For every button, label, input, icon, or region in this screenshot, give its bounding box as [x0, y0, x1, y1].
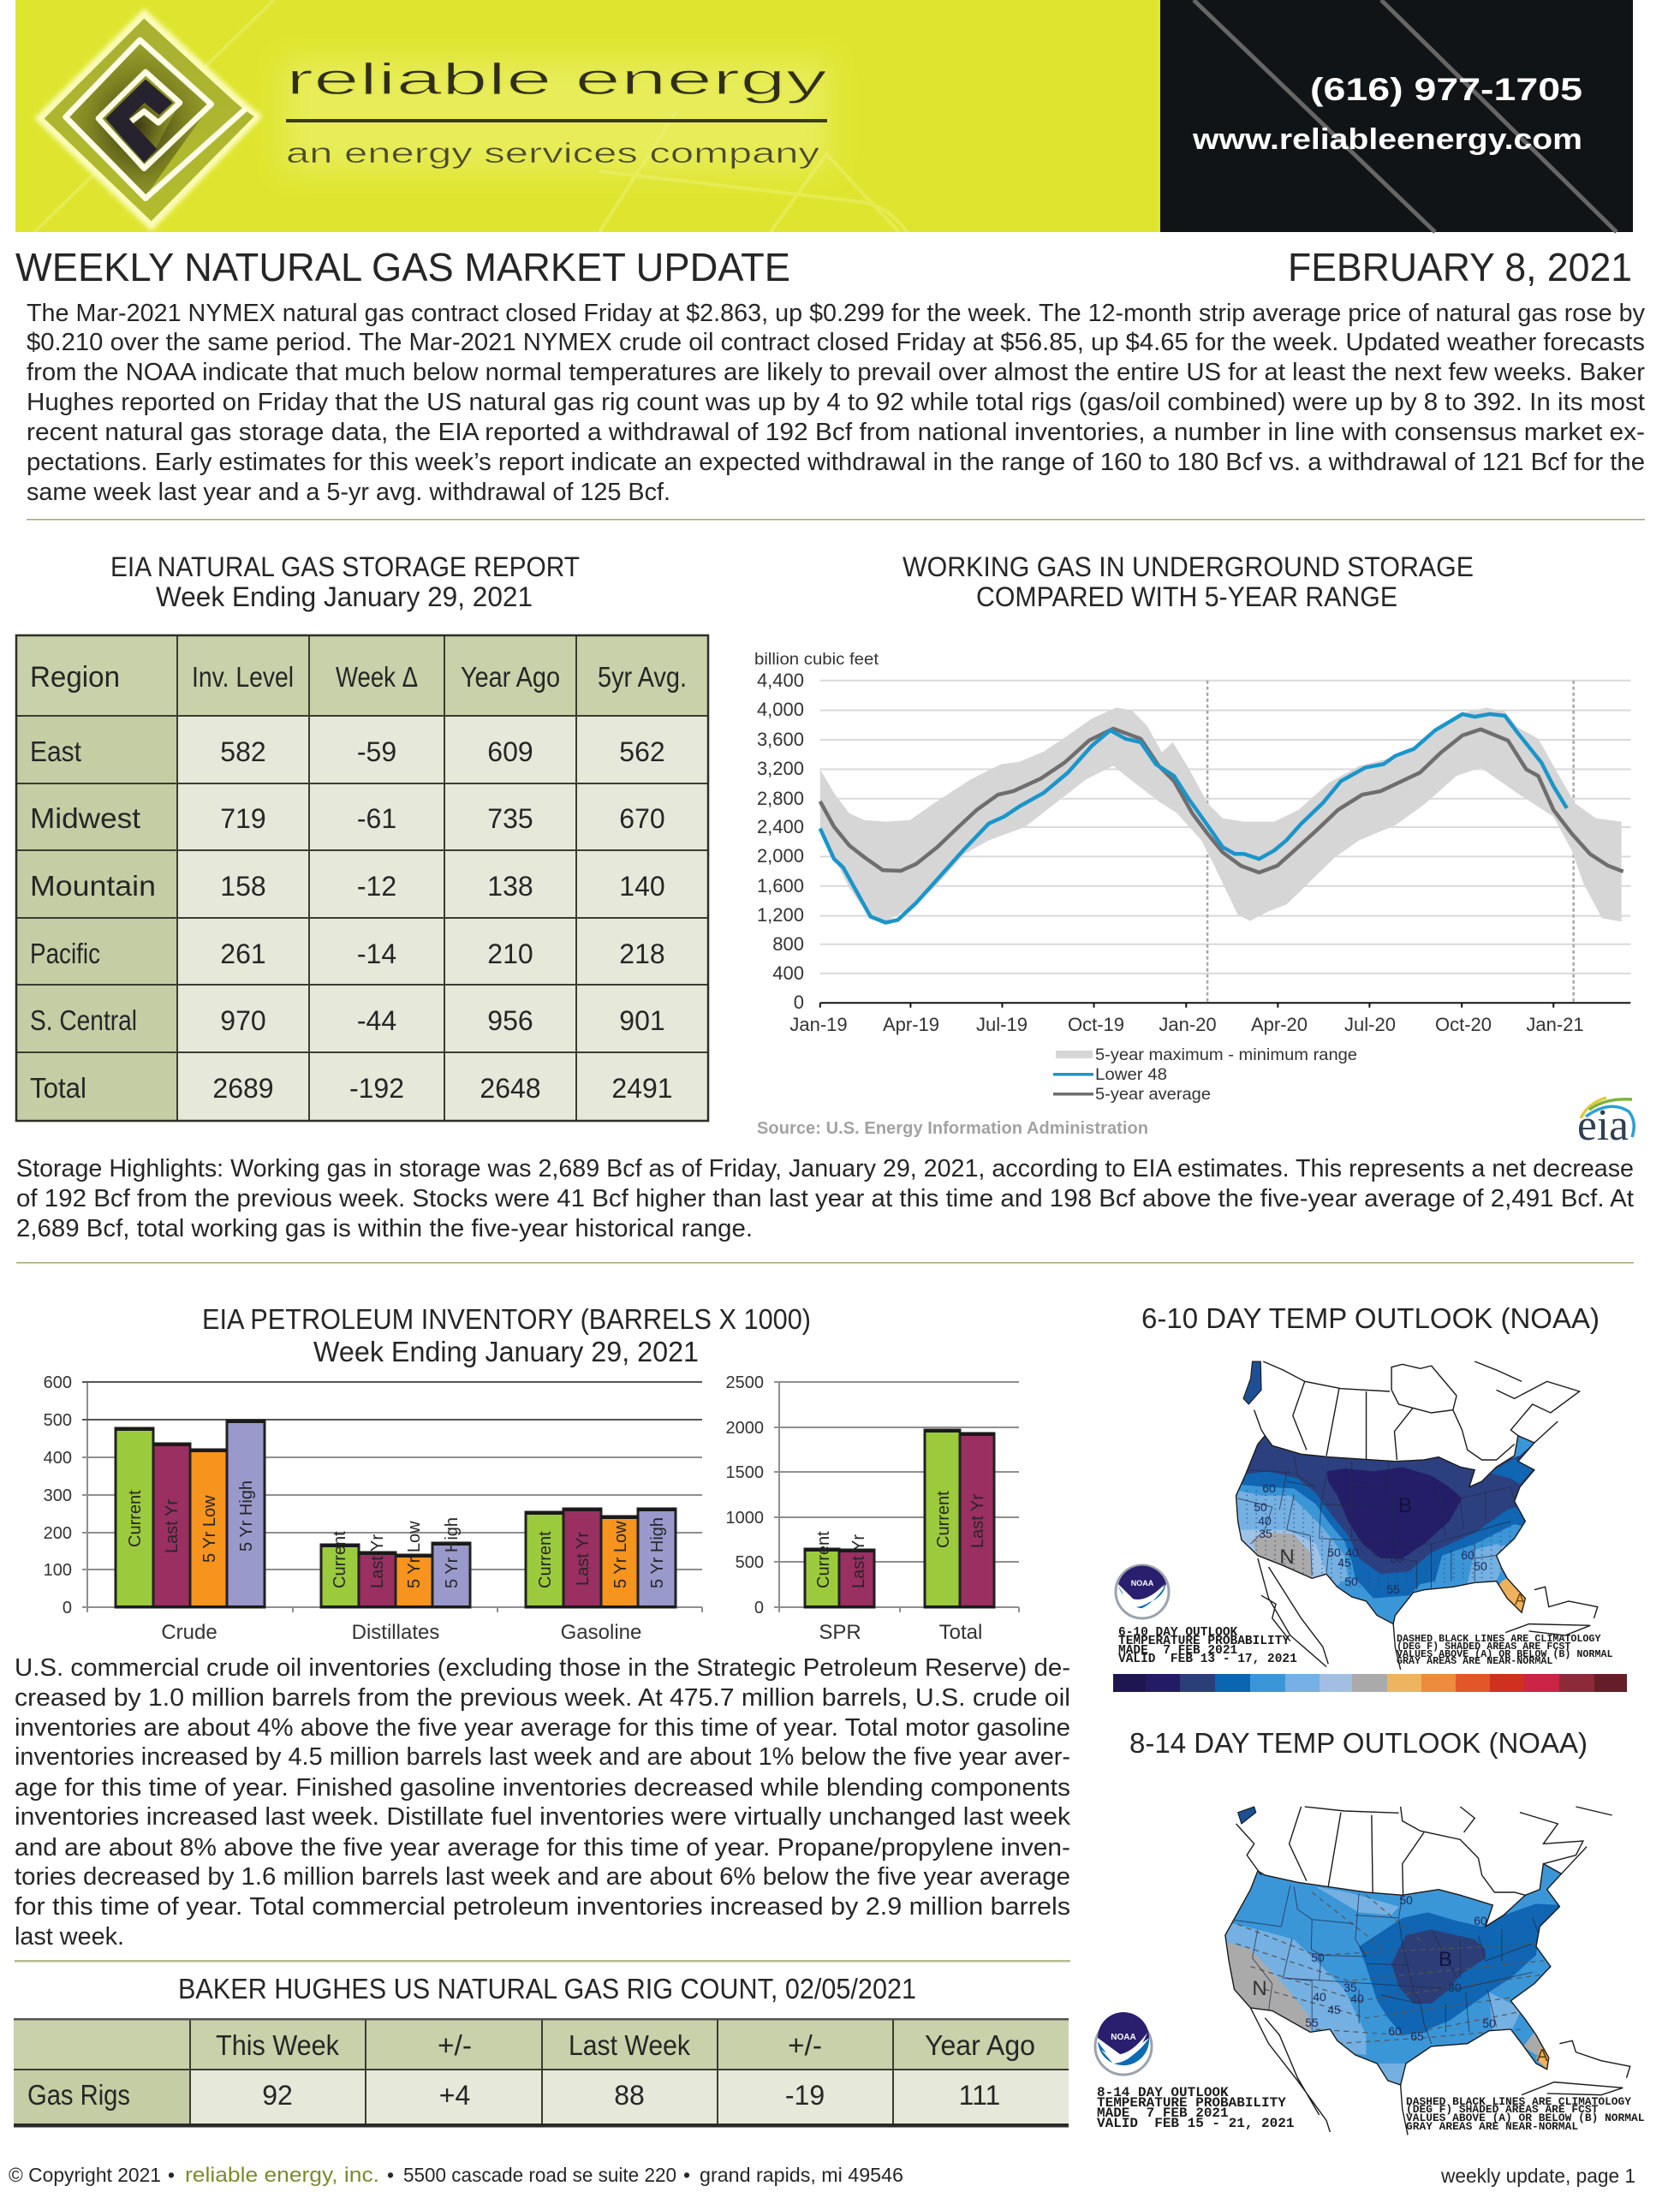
y axis labels: 0	[754, 1599, 764, 1617]
map region letters	[1279, 1494, 1525, 1608]
crude bars	[116, 1421, 265, 1608]
map region letters: B	[1398, 1494, 1412, 1517]
table: storage report: 2491	[611, 1073, 673, 1104]
table: storage report: -61	[357, 803, 396, 834]
distillates bars: Current	[331, 1531, 349, 1588]
date: FEBRUARY 8, 2021	[1288, 245, 1632, 289]
table: storage report: 901	[619, 1005, 665, 1036]
table: storage report: Inv. Level	[192, 661, 294, 693]
y axis labels: 4,400	[757, 670, 804, 691]
gasoline bars	[526, 1509, 676, 1608]
market summary paragraph	[27, 300, 1645, 506]
banner faint light curves	[33, 0, 909, 232]
outlook caption	[1118, 1626, 1297, 1666]
table: rig count: +/-	[438, 2029, 472, 2061]
map contour labels: 50	[1344, 1575, 1358, 1588]
storage highlights paragraph: of 192 Bcf from the previous week. Stocks were 41 Bcf higher than last year at this time and 198 Bcf above the five-year average of 2,491 Bcf. At	[16, 1185, 1634, 1212]
x axis labels: Oct-20	[1435, 1014, 1492, 1035]
country and coast outlines	[1225, 1864, 1562, 2085]
icon: NOAA logo	[1116, 1565, 1169, 1618]
category labels: Crude	[161, 1621, 217, 1644]
five-year range band	[820, 707, 1622, 921]
map contour labels: 60	[1474, 1914, 1487, 1927]
gridlines and axis	[774, 1382, 1019, 1612]
shaded probability regions	[1214, 1807, 1630, 2135]
map contour labels: 30	[1448, 1981, 1462, 1994]
crude bars: Last Yr	[163, 1499, 182, 1553]
y axis labels: 800	[772, 933, 804, 955]
distillates bars	[321, 1517, 470, 1608]
gasoline bars: 5 Yr High	[648, 1517, 667, 1588]
table: rig count	[14, 2018, 1069, 2127]
market summary paragraph: pectations. Early estimates for this week’s report indicate an expected withdrawal in the range of 160 to 180 Bcf vs. a withdrawal of 121 Bcf for the	[27, 449, 1645, 476]
map contour labels: 45	[1337, 1556, 1351, 1570]
x axis labels: Apr-19	[883, 1014, 939, 1035]
table: storage report: 582	[220, 736, 266, 767]
legend: 5-year average	[1095, 1086, 1211, 1104]
y axis labels: 1,600	[757, 875, 804, 896]
map contour labels: 55	[1305, 2016, 1319, 2029]
table: storage report: 210	[487, 938, 533, 969]
heading: EIA storage report: Week Ending January 29, 2021	[156, 581, 533, 612]
map contour labels: 50	[1482, 2016, 1496, 2030]
y axis labels	[44, 1373, 72, 1617]
market summary paragraph: Hughes reported on Friday that the US natural gas rig count was up by 4 to 92 while total rigs (gas/oil combined) were up by 8 to 392. In its most	[27, 389, 1645, 416]
y axis labels: 2000	[726, 1419, 764, 1438]
climatology note: DASHED BLACK LINES ARE CLIMATOLOGY	[1406, 2095, 1631, 2108]
table: storage report: 2689	[212, 1073, 274, 1104]
y axis labels	[726, 1373, 764, 1617]
table: rig count: Last Week	[569, 2029, 690, 2061]
y axis labels: 500	[736, 1553, 764, 1572]
icon: NOAA logo	[1095, 2012, 1152, 2075]
table: storage report: 670	[619, 803, 665, 834]
SPR bars: Last Yr	[849, 1534, 868, 1588]
x axis labels: Jan-21	[1526, 1014, 1584, 1035]
table: storage report: Midwest	[30, 802, 140, 834]
y axis labels	[757, 670, 804, 1013]
map region letters	[1252, 1948, 1548, 2065]
map contour labels: 50	[1254, 1500, 1267, 1514]
logo mark	[34, 9, 263, 231]
five-year average line	[820, 729, 1623, 873]
total bars	[925, 1430, 994, 1608]
market summary paragraph: from the NOAA indicate that much below normal temperatures are likely to prevail over almost the entire US for at least the next few weeks. Baker	[27, 359, 1645, 386]
table: rig count: -19	[785, 2080, 825, 2111]
probability colour strip	[1113, 1674, 1627, 1692]
glow behind logo text	[283, 60, 831, 171]
y axis labels: 1000	[726, 1509, 764, 1528]
logo tagline: an energy services company	[286, 137, 820, 169]
y axis labels: 1500	[726, 1463, 764, 1482]
climatology note: VALUES ABOVE (A) OR BELOW (B) NORMAL	[1406, 2112, 1645, 2124]
outlook caption: TEMPERATURE PROBABILITY	[1118, 1635, 1290, 1648]
outlook caption: MADE 7 FEB 2021	[1118, 1644, 1238, 1658]
footer: © Copyright 2021	[9, 2164, 161, 2186]
climatology note: DASHED BLACK LINES ARE CLIMATOLOGY	[1397, 1633, 1600, 1645]
header banner	[15, 0, 1633, 234]
distillates bars: Last Yr	[368, 1534, 387, 1588]
legend: 5-year maximum - minimum range	[1095, 1046, 1357, 1064]
map contour labels: 60	[1390, 1552, 1403, 1565]
y axis labels: 2,800	[757, 788, 804, 809]
lower 48 line	[820, 714, 1567, 923]
footer: •	[168, 2164, 175, 2186]
climatology note: (DEG F) SHADED AREAS ARE FCST	[1397, 1641, 1570, 1653]
table: storage report: Year Ago	[461, 661, 560, 693]
total bars: Last Yr	[968, 1494, 987, 1548]
y axis labels: 300	[44, 1486, 72, 1505]
map region letters: A	[1536, 2046, 1548, 2065]
heading: working gas chart: WORKING GAS IN UNDERGROUND STORAGE	[903, 551, 1474, 582]
SPR bars	[805, 1531, 874, 1608]
climatology note: GRAY AREAS ARE NEAR-NORMAL	[1406, 2120, 1578, 2133]
climatology note: GRAY AREAS ARE NEAR-NORMAL	[1397, 1655, 1552, 1667]
table: storage report: 158	[220, 871, 266, 902]
map: 6-10 day temperature outlook	[1113, 1361, 1627, 1692]
table: storage report: S. Central	[30, 1004, 137, 1036]
petroleum commentary paragraph: inventories increased by 4.5 million barrels last week and are about 1% below the five year aver-	[15, 1743, 1070, 1771]
y axis labels: 3,600	[757, 729, 804, 750]
climatology note	[1406, 2095, 1645, 2133]
petroleum commentary paragraph: age for this time of year. Finished gasoline inventories decreased while blending components	[15, 1774, 1070, 1802]
table: storage report: 562	[619, 736, 665, 767]
map contour labels: 50	[1327, 1546, 1341, 1559]
y axis labels: 400	[44, 1449, 72, 1468]
category labels	[161, 1621, 641, 1644]
table: storage report: -192	[349, 1073, 404, 1104]
SPR bars: Current	[814, 1531, 833, 1588]
category labels	[819, 1621, 982, 1644]
map contour labels: 40	[1350, 1992, 1364, 2005]
crude bars: Current	[126, 1490, 145, 1547]
table: rig count: Gas Rigs	[27, 2079, 130, 2111]
phone number: (616) 977-1705	[1310, 72, 1582, 107]
heading: rig count: BAKER HUGHES US NATURAL GAS RIG COUNT, 02/05/2021	[178, 1973, 916, 2004]
table: storage report: 218	[619, 938, 665, 969]
y axis title: billion cubic feet	[754, 651, 879, 669]
footer: •	[387, 2164, 394, 2186]
x axis labels: Jul-19	[976, 1014, 1028, 1035]
logo rule	[286, 119, 827, 122]
market summary paragraph: recent natural gas storage data, the EIA reported a withdrawal of 192 Bcf from national inventories, a number in line with consensus market ex-	[27, 419, 1645, 446]
table: storage report: -14	[357, 938, 396, 969]
legend: Lower 48	[1095, 1066, 1167, 1084]
source note: Source: U.S. Energy Information Administration	[757, 1119, 1148, 1138]
x axis labels: Apr-20	[1251, 1014, 1308, 1035]
y axis labels: 100	[44, 1561, 72, 1580]
market summary paragraph: same week last year and a 5-yr avg. withdrawal of 125 Bcf.	[27, 479, 670, 506]
y axis labels: 2500	[726, 1373, 764, 1392]
y axis labels: 500	[44, 1411, 72, 1430]
website: www.reliableenergy.com	[1192, 123, 1582, 156]
outlook caption: 8-14 DAY OUTLOOK	[1097, 2085, 1229, 2100]
table: rig count: 92	[262, 2080, 293, 2111]
footer: 5500 cascade road se suite 220	[403, 2164, 676, 2186]
table: storage report: 2648	[480, 1073, 541, 1104]
table: rig count: 88	[614, 2080, 645, 2111]
country and coast outlines	[1236, 1436, 1534, 1624]
outlook caption: 6-10 DAY OUTLOOK	[1118, 1626, 1238, 1640]
petroleum commentary paragraph: inventories are about 4% above the five year average for this time of year. Total motor gasoline	[15, 1714, 1070, 1742]
outlook caption: VALID FEB 15 - 21, 2021	[1097, 2116, 1294, 2131]
table: storage report: Region	[30, 661, 120, 694]
storage highlights paragraph: 2,689 Bcf, total working gas is within the five-year historical range.	[16, 1215, 753, 1242]
footer: reliable energy, inc.	[185, 2164, 379, 2187]
legend	[1053, 1046, 1357, 1104]
table: storage report: 719	[220, 803, 266, 834]
y axis labels: 200	[44, 1524, 72, 1543]
petroleum commentary paragraph: and are about 8% above the five year average for this time of year. Propane/propylene inven-	[15, 1834, 1070, 1861]
heading: petroleum inventory: EIA PETROLEUM INVENTORY (BARRELS X 1000)	[202, 1303, 811, 1335]
table: storage report: 140	[619, 871, 665, 902]
outlook caption: VALID FEB 13 - 17, 2021	[1118, 1653, 1297, 1666]
icon: eia logo: eia	[1577, 1101, 1629, 1150]
heading: EIA storage report	[110, 551, 580, 612]
heading: petroleum inventory	[202, 1303, 811, 1367]
chart: working gas in storage	[754, 651, 1634, 1150]
table: rig count: 111	[959, 2080, 1000, 2111]
table: rig count: This Week	[216, 2029, 339, 2061]
heading: working gas chart: COMPARED WITH 5-YEAR RANGE	[976, 581, 1397, 612]
y axis labels: 0	[794, 992, 804, 1013]
table: storage report: -12	[357, 871, 396, 902]
crude bars: 5 Yr High	[237, 1480, 256, 1552]
outlook caption: MADE 7 FEB 2021	[1097, 2106, 1229, 2121]
heading: petroleum inventory: Week Ending January 29, 2021	[313, 1336, 699, 1367]
petroleum commentary paragraph: creased by 1.0 million barrels from the previous week. At 475.7 million barrels, U.S. crude oil	[15, 1684, 1070, 1712]
map contour labels: 50	[1311, 1951, 1325, 1964]
map contour labels: 60	[1262, 1481, 1276, 1495]
map contour labels: 65	[1410, 2029, 1424, 2043]
contact panel	[1160, 0, 1633, 232]
x axis labels: Oct-19	[1068, 1014, 1124, 1035]
outlook caption: TEMPERATURE PROBABILITY	[1097, 2095, 1286, 2111]
y axis labels: 2,400	[757, 816, 804, 837]
map contour labels: 40	[1313, 1990, 1326, 2004]
crude bars: 5 Yr Low	[200, 1495, 219, 1563]
storage highlights paragraph	[16, 1155, 1634, 1242]
distillates bars: 5 Yr High	[443, 1517, 462, 1588]
map region letters: N	[1252, 1977, 1267, 2000]
table: storage report	[16, 635, 708, 1121]
table: storage report: 138	[487, 871, 533, 902]
y axis labels: 4,000	[757, 699, 804, 720]
y axis labels: 400	[772, 962, 804, 984]
shaded probability regions	[1222, 1361, 1598, 1670]
gridlines and axis	[82, 1382, 702, 1612]
gasoline bars: 5 Yr Low	[611, 1521, 630, 1588]
icon: NOAA logo: NOAA	[1111, 2033, 1136, 2042]
y axis labels: 1,200	[757, 904, 804, 926]
bar chart: crude, distillates, gasoline	[44, 1373, 702, 1644]
y axis labels: 0	[63, 1599, 72, 1617]
map contour labels: 60	[1461, 1548, 1474, 1562]
bar chart: SPR and total	[726, 1373, 1019, 1644]
table: storage report: Week Δ	[336, 661, 418, 693]
map region letters: N	[1279, 1546, 1295, 1569]
table: storage report: 735	[487, 803, 533, 834]
petroleum commentary paragraph	[15, 1654, 1071, 1951]
table: storage report: East	[30, 736, 81, 767]
map contour labels: 40	[1345, 1546, 1359, 1559]
y axis labels: 2,000	[757, 845, 804, 867]
x axis labels	[789, 1014, 1584, 1035]
plot area	[820, 681, 1630, 1008]
footer	[9, 2164, 1635, 2187]
heading: working gas chart	[903, 551, 1474, 612]
distillates bars: 5 Yr Low	[405, 1521, 424, 1588]
category labels: Gasoline	[561, 1621, 641, 1644]
map contour labels: 60	[1388, 2024, 1402, 2038]
gasoline bars: Last Yr	[574, 1532, 593, 1586]
map contour labels: 55	[1386, 1582, 1400, 1596]
table: storage report: Total	[30, 1072, 86, 1104]
category labels: Total	[939, 1621, 982, 1644]
petroleum commentary paragraph: U.S. commercial crude oil inventories (excluding those in the Strategic Petroleum Reserve) de-	[15, 1654, 1070, 1682]
page number: weekly update, page 1	[1440, 2165, 1635, 2187]
table: storage report: -44	[357, 1005, 396, 1036]
climatology note: (DEG F) SHADED AREAS ARE FCST	[1406, 2103, 1599, 2116]
map contour labels: 50	[1474, 1559, 1487, 1573]
y axis labels: 600	[44, 1373, 72, 1392]
logo wordmark: reliable energy	[286, 55, 827, 104]
y axis labels: 3,200	[757, 758, 804, 779]
table: storage report: 261	[220, 938, 266, 969]
heading: EIA storage report: EIA NATURAL GAS STORAGE REPORT	[110, 551, 580, 582]
table: rig count: +4	[439, 2080, 470, 2111]
outlook caption	[1097, 2085, 1294, 2131]
map contour labels: 35	[1259, 1527, 1272, 1540]
gasoline bars: Current	[536, 1531, 555, 1588]
map: 8-14 day temperature outlook	[1095, 1807, 1645, 2135]
category labels: Distillates	[352, 1621, 439, 1644]
table: rig count: +/-	[788, 2029, 822, 2061]
map contour labels	[1305, 1893, 1496, 2043]
map contour labels: 40	[1258, 1514, 1272, 1528]
map region letters: A	[1515, 1591, 1525, 1608]
map contour labels: 45	[1327, 2003, 1341, 2016]
table: storage report: 609	[487, 736, 533, 767]
table: storage report: 5yr Avg.	[598, 661, 687, 693]
climatology note: VALUES ABOVE (A) OR BELOW (B) NORMAL	[1397, 1648, 1613, 1660]
table: storage report: Pacific	[30, 938, 100, 969]
x axis labels: Jan-19	[789, 1014, 848, 1035]
market summary paragraph: $0.210 over the same period. The Mar-2021 NYMEX crude oil contract closed Friday at $56.85, up $4.65 for the week. Updated weather forecasts	[27, 329, 1645, 356]
table: storage report: -59	[357, 736, 396, 767]
map contour labels: 35	[1343, 1981, 1357, 1994]
heading: 6-10 day outlook: 6-10 DAY TEMP OUTLOOK (NOAA)	[1141, 1302, 1600, 1334]
heading: 8-14 day outlook: 8-14 DAY TEMP OUTLOOK (NOAA)	[1129, 1727, 1588, 1759]
map region letters: B	[1439, 1948, 1452, 1971]
petroleum commentary paragraph: inventories increased last week. Distillate fuel inventories were virtually unchanged last week	[15, 1803, 1071, 1831]
petroleum commentary paragraph: last week.	[15, 1923, 124, 1951]
petroleum commentary paragraph: tories decreased by 1.6 million barrels last week and are about 6% below the five year average	[15, 1863, 1070, 1891]
footer: •	[683, 2164, 690, 2186]
table: storage report: 956	[487, 1005, 533, 1036]
map contour labels: 50	[1399, 1893, 1413, 1907]
total bars: Current	[934, 1491, 953, 1548]
banner lime background	[15, 0, 1160, 232]
table: storage report: Mountain	[30, 870, 156, 902]
category labels: SPR	[819, 1621, 861, 1644]
market summary paragraph: The Mar-2021 NYMEX natural gas contract closed Friday at $2.863, up $0.299 for the week. The 12-month strip average price of natural gas rose by	[27, 300, 1645, 327]
title: WEEKLY NATURAL GAS MARKET UPDATE	[15, 245, 790, 289]
x axis labels: Jul-20	[1344, 1014, 1396, 1035]
footer: grand rapids, mi 49546	[700, 2164, 903, 2186]
table: rig count: Year Ago	[925, 2029, 1035, 2061]
petroleum commentary paragraph: for this time of year. Total commercial petroleum inventories increased by 2.9 million barrels	[15, 1893, 1070, 1921]
x axis labels: Jan-20	[1159, 1014, 1217, 1035]
storage highlights paragraph: Storage Highlights: Working gas in storage was 2,689 Bcf as of Friday, January 29, 2021, according to EIA estimates. This represents a net decrease	[16, 1155, 1634, 1182]
climatology note	[1397, 1633, 1613, 1667]
table: storage report: 970	[220, 1005, 266, 1036]
icon: NOAA logo: NOAA	[1131, 1579, 1154, 1587]
map contour labels	[1254, 1481, 1487, 1596]
